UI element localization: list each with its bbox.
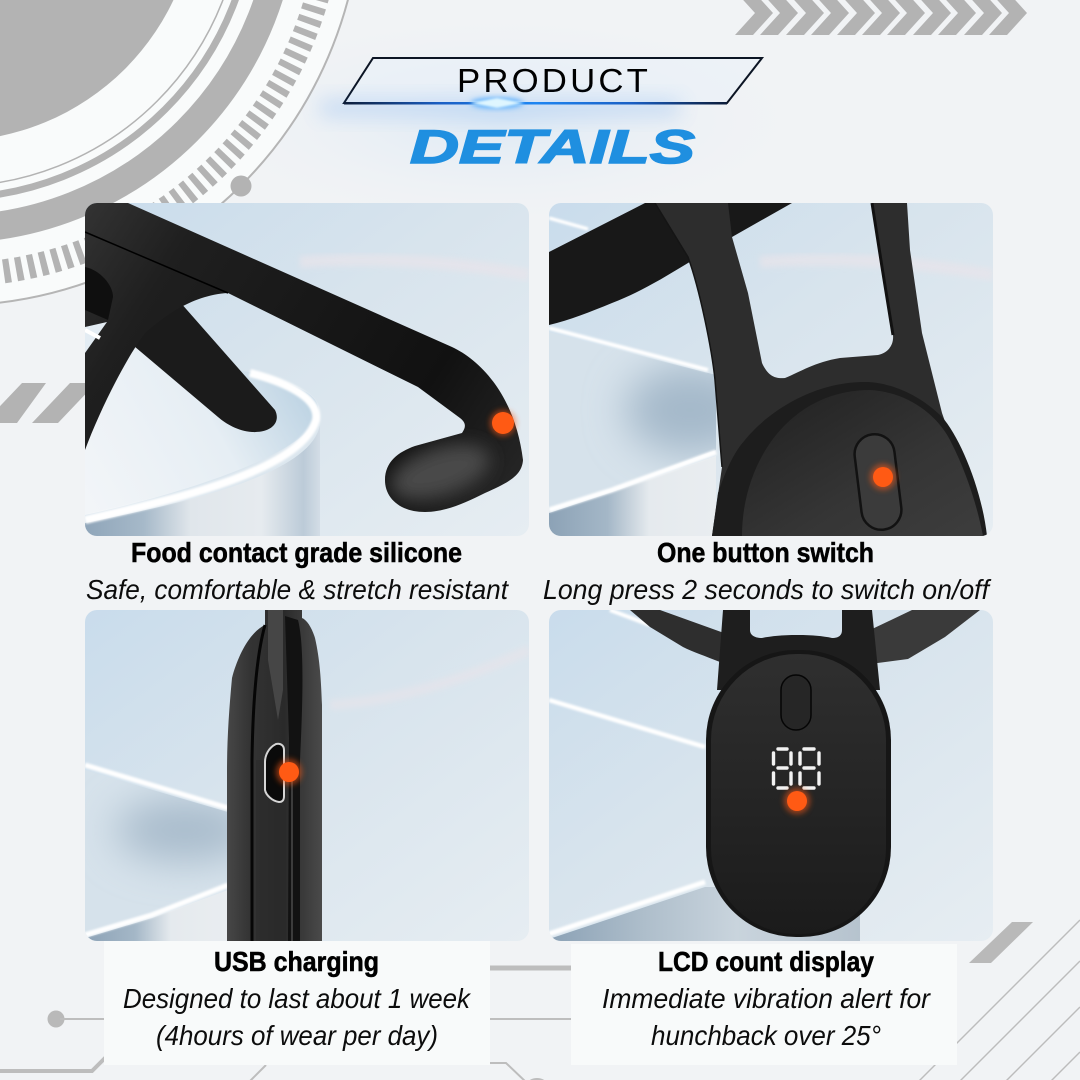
oval device body: [706, 650, 891, 937]
panel: one button switch photo: [549, 203, 993, 536]
title: PRODUCT in slanted frame: PRODUCT: [457, 62, 651, 99]
panel: USB charging photo: [85, 610, 529, 941]
left slanted bars decoration: [0, 383, 96, 423]
silver steps and light stripes: [549, 610, 860, 941]
round pod body: [712, 382, 987, 536]
caption: food contact grade silicone: [86, 537, 509, 605]
right diagonal hatch decoration: [900, 920, 1080, 1080]
caption box: LCD count display: LCD count display: [658, 946, 874, 977]
bottom circuit lines decoration: [0, 968, 580, 1080]
right arm: [870, 610, 980, 664]
silver cylinder: [85, 330, 320, 536]
silver steps and light stripes: [549, 216, 717, 536]
seven segment display reading 88: [774, 749, 819, 788]
marker dot: [276, 759, 302, 785]
main silicone band and hook: [85, 203, 523, 512]
marker dot: [490, 410, 516, 436]
chevron row decoration: [735, 0, 1027, 35]
caption: food contact grade silicone: Food contact grade silicone: [131, 537, 462, 568]
concentric tech circle decoration: [0, 0, 362, 306]
caption: one button switch: [543, 537, 992, 605]
panel: LCD count display photo: [549, 610, 993, 941]
USB port: [265, 744, 284, 802]
caption box: LCD count display: hunchback over 25°: [651, 1020, 881, 1051]
caption box: USB charging: Designed to last about 1 week: [123, 983, 472, 1014]
button outline: [781, 675, 811, 730]
yoke frame with window: [717, 610, 880, 690]
caption box: USB charging: (4hours of wear per day): [156, 1020, 438, 1051]
caption box: LCD count display: Immediate vibration alert for: [602, 983, 932, 1014]
marker dot: [870, 464, 896, 490]
rear silicone arm: [549, 203, 792, 325]
caption: one button switch: Long press 2 seconds to switch on/off: [543, 574, 992, 605]
panel: food contact grade silicone photo: [85, 203, 529, 536]
blue light beam under title: [320, 98, 727, 116]
left arm: [630, 610, 724, 662]
switch button: [852, 432, 904, 532]
title: DETAILS: DETAILS: [410, 120, 695, 173]
caption box: USB charging: USB charging: [214, 946, 379, 977]
caption box: LCD count display: [571, 944, 957, 1065]
caption: food contact grade silicone: Safe, comfortable & stretch resistant: [86, 574, 509, 605]
silver steps and light stripes: [85, 762, 227, 941]
device side view: [227, 610, 322, 941]
yoke frame: [655, 203, 985, 536]
caption: one button switch: One button switch: [657, 537, 874, 568]
back silicone arm: [135, 306, 277, 432]
marker dot: [784, 788, 810, 814]
caption box: USB charging: [104, 941, 490, 1065]
title: PRODUCT in slanted frame: [344, 58, 762, 103]
